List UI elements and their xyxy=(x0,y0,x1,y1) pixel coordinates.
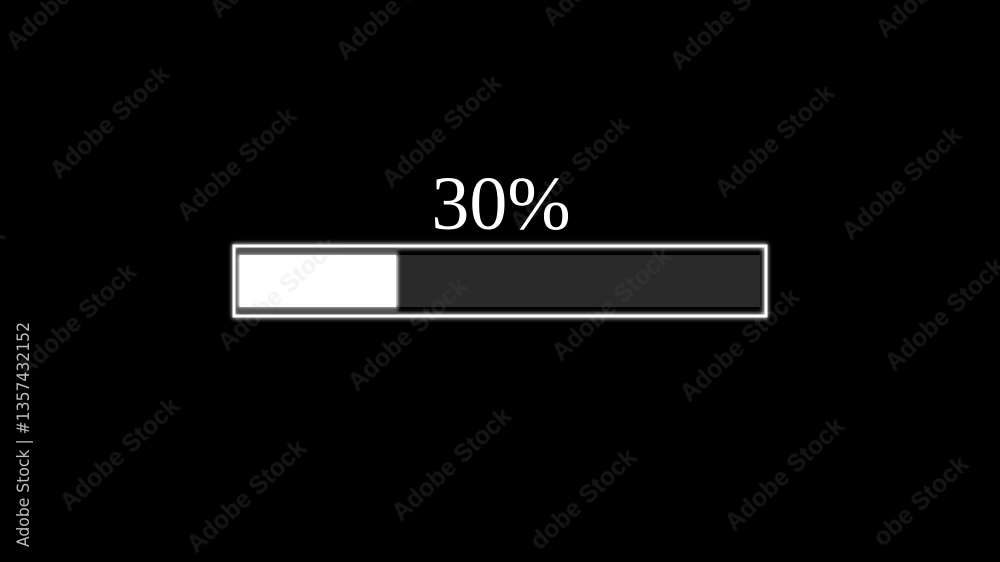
watermark pattern: Adobe Stock xyxy=(342,272,473,396)
watermark pattern: Adobe Stock xyxy=(376,69,507,193)
bar frame glow xyxy=(234,246,766,316)
watermark pattern: Adobe Stock xyxy=(54,392,185,516)
watermark pattern: Adobe Stock xyxy=(546,242,677,366)
fill glow xyxy=(238,255,398,307)
watermark pattern: Adobe Stock xyxy=(386,402,517,526)
watermark pattern: Adobe Stock xyxy=(719,412,850,536)
white progress fill xyxy=(240,255,396,307)
percentage label: 30% xyxy=(431,162,571,246)
watermark pattern: Adobe Stock xyxy=(836,121,967,245)
watermark pattern: Adobe Stock xyxy=(674,283,805,407)
empty track xyxy=(398,255,760,307)
watermark pattern: obe Stock xyxy=(868,450,974,552)
track watermark overlay: Adobe Stock xyxy=(546,242,677,366)
watermark pattern: Adobe Stock xyxy=(44,60,175,184)
watermark pattern: dobe Stock xyxy=(524,443,642,555)
gray band around fill xyxy=(236,248,398,314)
track watermark overlay xyxy=(432,256,670,307)
watermark pattern: Adobe Stock xyxy=(212,232,343,356)
bar frame xyxy=(234,246,766,316)
watermark pattern: Adobe Stock xyxy=(171,102,302,226)
fill watermark overlay: Adobe Stock xyxy=(212,232,343,356)
watermark pattern: Adobe Stock xyxy=(504,111,635,235)
progress bar xyxy=(228,240,772,322)
track watermark overlay: Adobe Stock xyxy=(504,111,635,235)
track watermark overlay: Adobe Stock xyxy=(674,283,805,407)
stock id vertical text: Adobe Stock | #1357432152 xyxy=(14,322,34,547)
track watermark overlay: Adobe Stock xyxy=(376,69,507,193)
watermark pattern: Adobe Stock xyxy=(709,79,840,203)
watermark pattern: Adobe Stock xyxy=(11,258,142,382)
watermark pattern: Adobe Stock xyxy=(181,434,312,558)
track watermark overlay: Adobe Stock xyxy=(342,272,473,396)
